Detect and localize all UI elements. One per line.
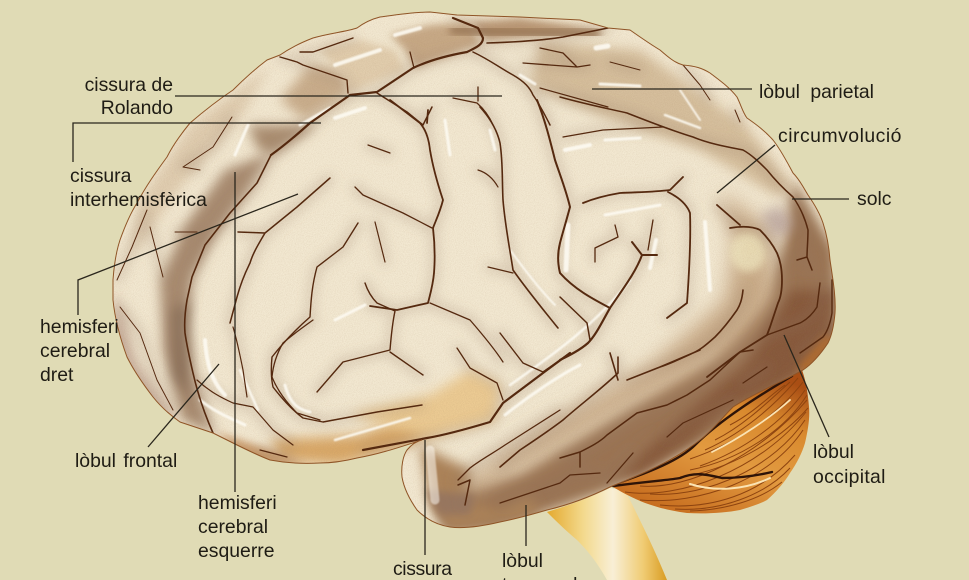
label: hemisferi cerebral esquerre: hemisferi: [198, 492, 277, 514]
label: lòbul frontal: lòbul frontal: [75, 450, 177, 472]
label: lòbul temporal: lòbul: [502, 550, 543, 572]
cerebrum: [100, 0, 860, 540]
label: cissura interhemisfèrica: interhemisfèrica: [70, 189, 207, 211]
valley shading along sulci: [117, 18, 832, 505]
illustration: brain: [100, 0, 860, 580]
label: cissura interhemisfèrica: cissura: [70, 165, 131, 187]
cerebellum: [613, 370, 809, 513]
highlights: [200, 28, 710, 500]
label: hemisferi cerebral dret: cerebral: [40, 340, 110, 362]
label: lòbul occipital: occipital: [813, 466, 886, 488]
label: lòbul occipital: lòbul: [813, 441, 854, 463]
cerebellum folds: [613, 376, 792, 486]
label: hemisferi cerebral dret: hemisferi: [40, 316, 119, 338]
label: cissura: cissura: [393, 558, 452, 580]
leader lines: [73, 89, 849, 555]
grain: [114, 12, 822, 520]
label: lòbul parietal: lòbul parietal: [759, 81, 874, 103]
label: circumvolució: circumvolució: [778, 125, 902, 147]
label: solc: solc: [857, 188, 892, 210]
shading: [110, 18, 838, 532]
label: hemisferi cerebral dret: dret: [40, 364, 74, 386]
brain outline: [113, 12, 835, 528]
sulci: [117, 18, 832, 505]
label: cissura de Rolando: Rolando: [101, 97, 173, 119]
label: hemisferi cerebral esquerre: esquerre: [198, 540, 275, 562]
brain stem: [547, 488, 667, 580]
label: cissura de Rolando: cissura de: [85, 74, 173, 96]
label: hemisferi cerebral esquerre: cerebral: [198, 516, 268, 538]
